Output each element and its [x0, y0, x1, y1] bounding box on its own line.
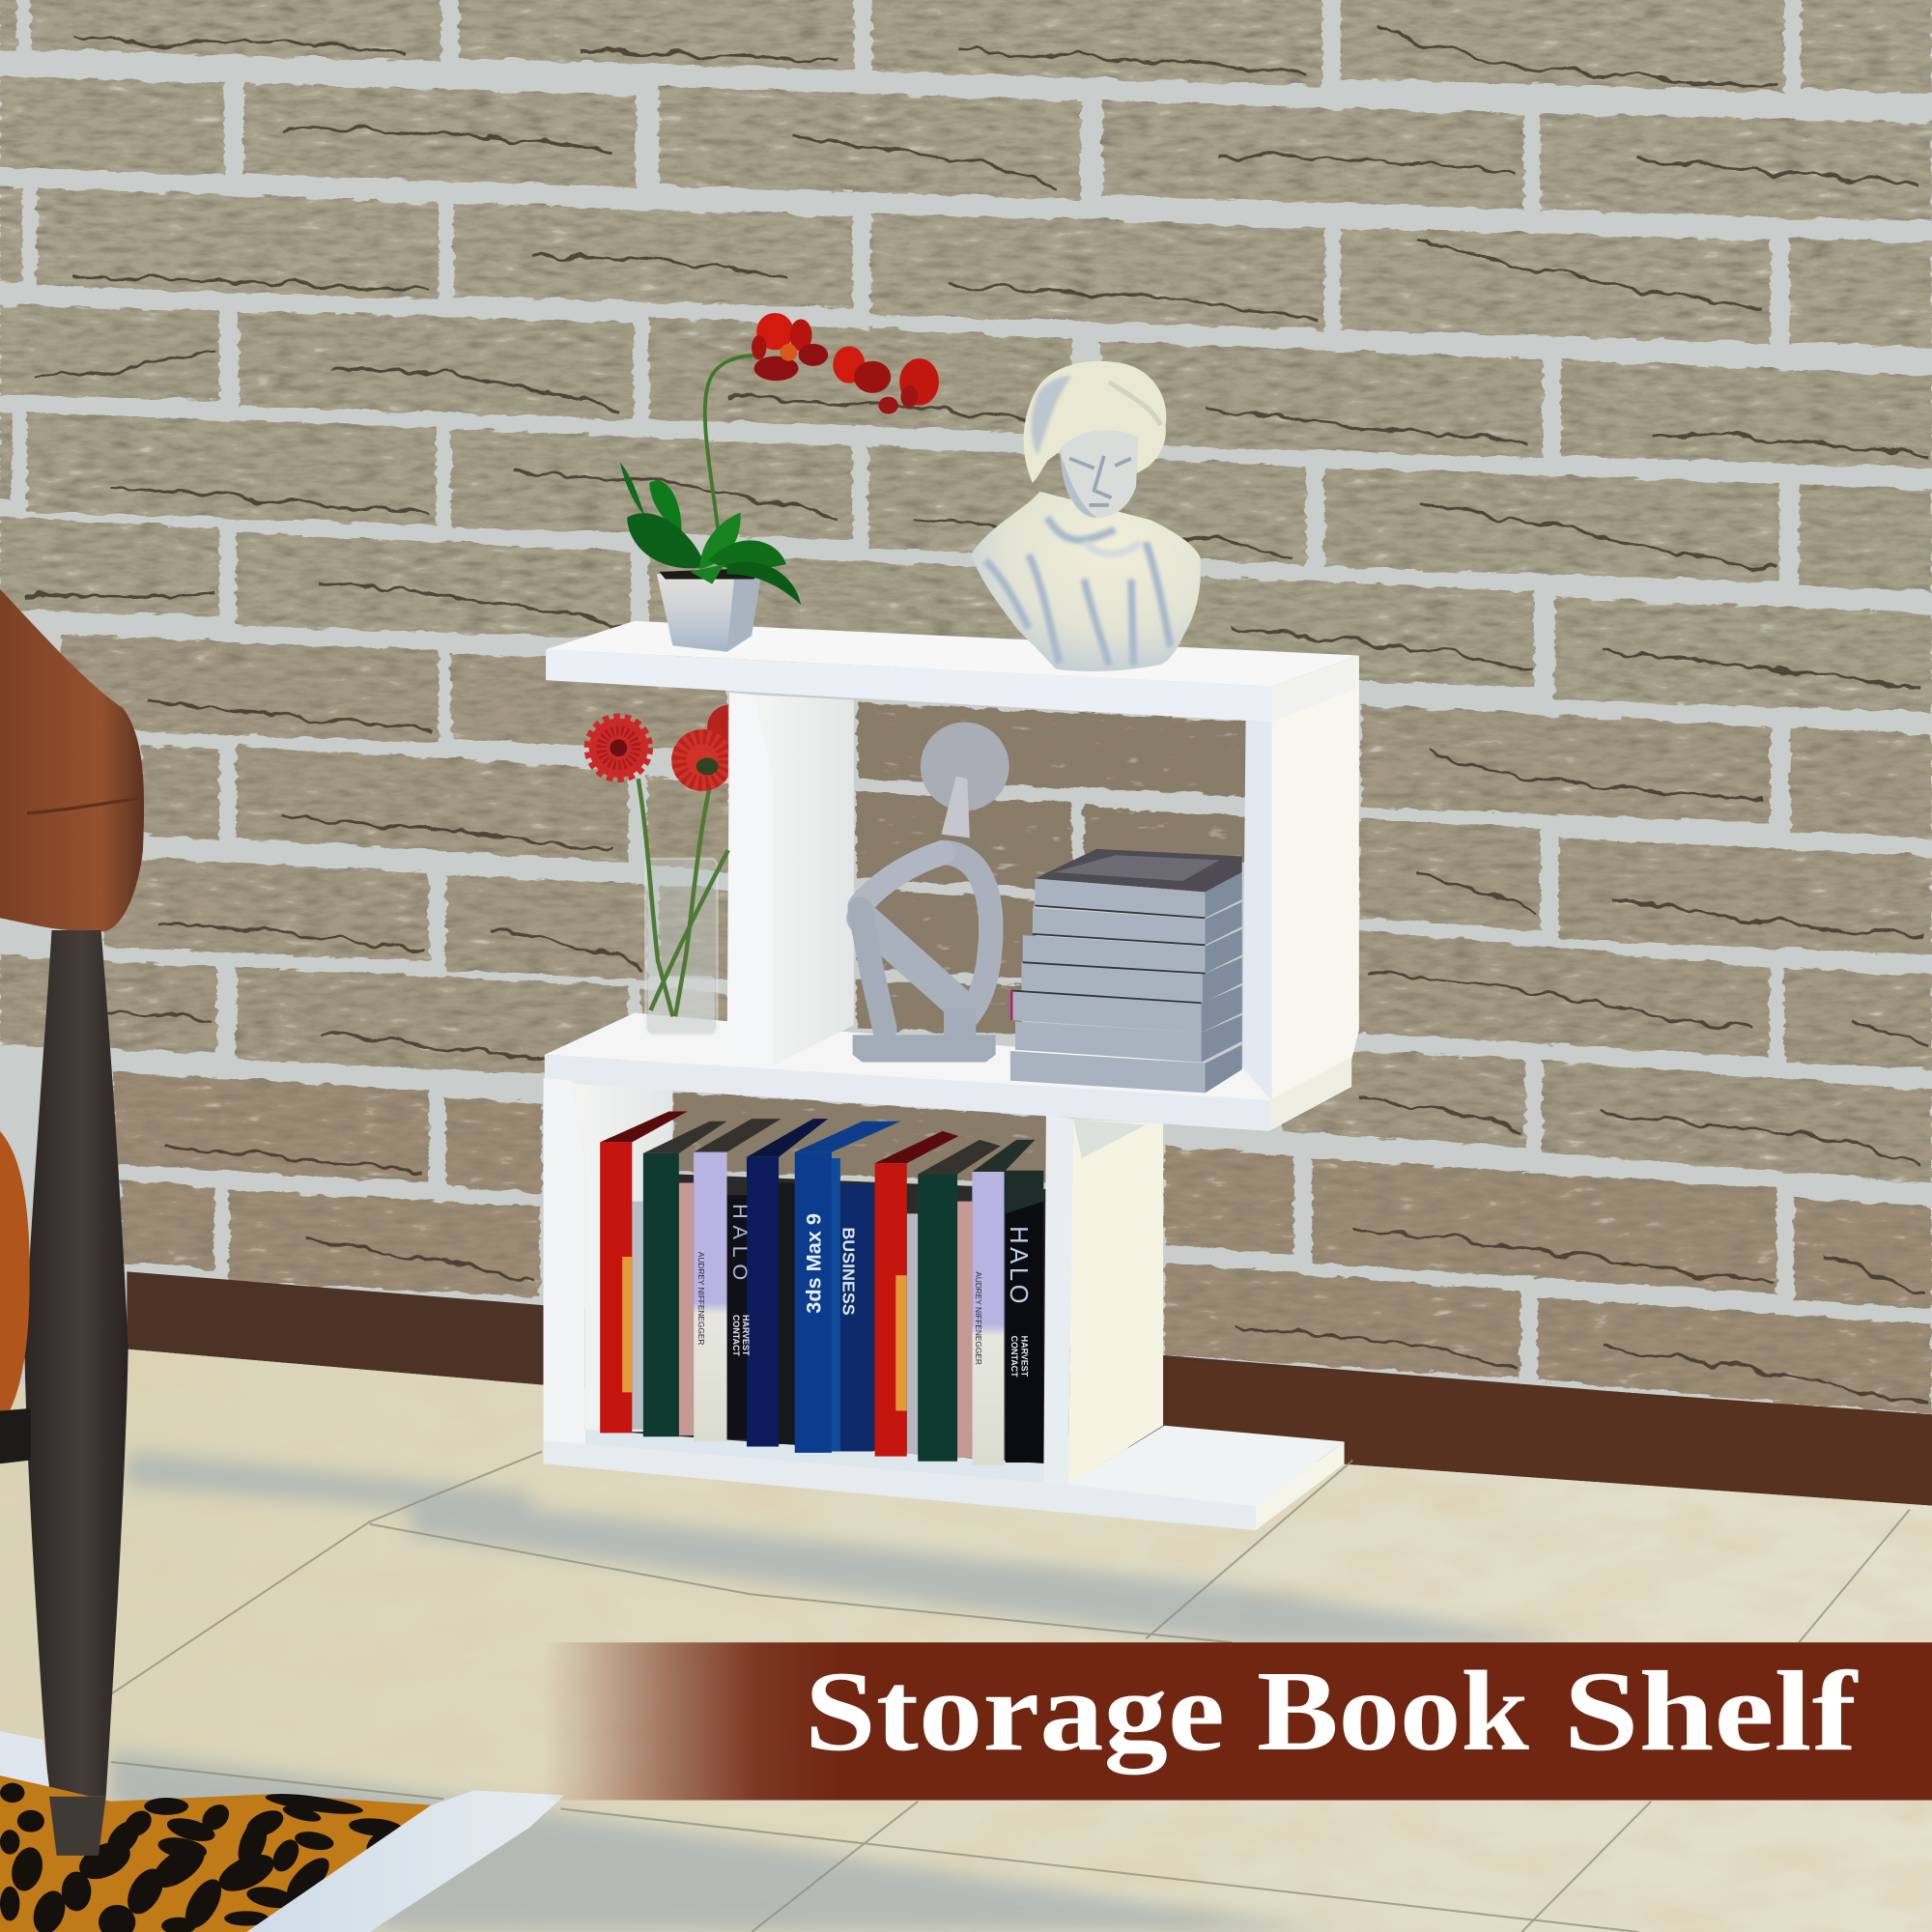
spine labels: HALO	[1005, 1226, 1032, 1303]
blue book	[795, 1152, 832, 1453]
lower left panel	[543, 1078, 585, 1444]
rug trim right	[246, 1790, 564, 1932]
spines behind	[632, 1202, 643, 1430]
armchair	[0, 589, 144, 1797]
spine labels: CONTACT	[1009, 1336, 1019, 1378]
spine labels	[696, 1204, 1032, 1378]
orange cushion	[0, 1131, 30, 1427]
green book	[643, 1153, 679, 1436]
spine labels: CONTACT	[731, 1315, 741, 1356]
floor shadows	[111, 1452, 1589, 1932]
lower right panel	[1043, 1115, 1163, 1486]
navy book	[747, 1157, 779, 1446]
stems	[639, 777, 728, 1016]
title text: Shelf	[1564, 1647, 1859, 1775]
tile joints	[111, 1452, 1910, 1932]
skirting board	[127, 1271, 1932, 1506]
title banner	[542, 1642, 1932, 1801]
book tops	[600, 1112, 1035, 1175]
stem	[705, 355, 764, 532]
book shelf	[543, 621, 1359, 1530]
spine labels: HALO	[728, 1204, 753, 1280]
spine labels: HARVEST	[741, 1315, 751, 1356]
title text: Book	[1257, 1647, 1529, 1775]
brick cracks	[25, 25, 1928, 1405]
spine labels: BUSINESS	[838, 1227, 858, 1316]
torso	[971, 492, 1201, 671]
second green book	[918, 1175, 957, 1462]
coat folds	[985, 518, 1171, 666]
spine labels: 3ds Max 9	[801, 1213, 825, 1314]
composer bust	[971, 361, 1201, 671]
spine labels: AUDREY NIFFENEGGER	[696, 1252, 706, 1345]
upper divider panel	[727, 693, 854, 1065]
chair leg	[25, 930, 128, 1797]
orchid in pot	[620, 313, 939, 652]
base board	[543, 1426, 1345, 1530]
spine labels: AUDREY NIFFENEGGER	[974, 1271, 983, 1365]
black book	[1006, 1202, 1043, 1463]
blooms	[752, 313, 939, 414]
upper right side panel	[1242, 656, 1359, 1104]
leg foot	[49, 1797, 106, 1856]
top board	[546, 621, 1359, 722]
rug trim left	[0, 1731, 49, 1786]
face	[1060, 430, 1139, 518]
leather arm	[0, 589, 144, 931]
lavender book	[694, 1152, 727, 1441]
middle board	[545, 1012, 1351, 1131]
gerbera flowers in glass vase	[589, 705, 752, 1035]
spine labels: HARVEST	[1019, 1336, 1029, 1378]
books on lower shelf	[600, 1112, 1043, 1465]
tiled floor	[0, 1350, 1932, 1932]
flower heads	[583, 705, 728, 791]
red book	[600, 1142, 632, 1433]
lower compartment back	[543, 1081, 1046, 1486]
leaves	[620, 462, 801, 605]
hair	[1024, 361, 1166, 483]
brick wall	[0, 0, 1932, 1516]
chair rail	[0, 1408, 31, 1463]
stack of books	[1010, 849, 1242, 1093]
vase	[645, 859, 717, 1035]
second red book	[875, 1163, 907, 1457]
second lavender book	[972, 1172, 1005, 1465]
pot	[657, 568, 761, 652]
thinker statuette	[853, 722, 1009, 1062]
teal book	[840, 1184, 873, 1452]
title text: Storage	[805, 1647, 1225, 1775]
leopard rug	[0, 1731, 564, 1932]
